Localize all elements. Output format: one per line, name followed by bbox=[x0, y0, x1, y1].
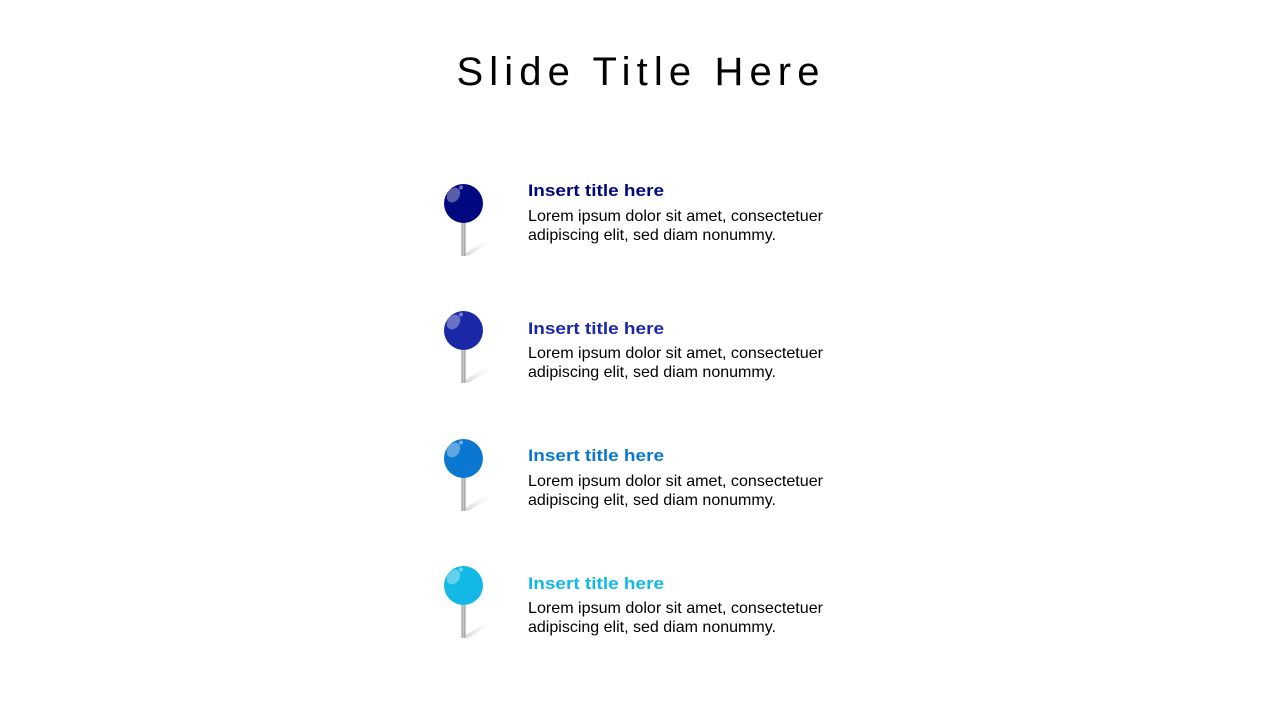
icon: pin 1 bbox=[444, 184, 490, 256]
text block 3: Lorem ipsum dolor sit amet, consectetuer bbox=[528, 473, 824, 490]
text block 1: Insert title here bbox=[528, 181, 664, 200]
text block 4: Insert title here bbox=[528, 574, 664, 593]
text block 1: Lorem ipsum dolor sit amet, consectetuer bbox=[528, 208, 824, 225]
text block 4: adipiscing elit, sed diam nonummy. bbox=[528, 619, 776, 636]
icon: pin 2 bbox=[444, 311, 490, 383]
text block 2: Lorem ipsum dolor sit amet, consectetuer bbox=[528, 345, 824, 362]
item 2 bbox=[444, 311, 824, 383]
text block 3 bbox=[528, 446, 824, 509]
item 3 bbox=[444, 439, 824, 511]
title: Slide Title Here bbox=[456, 50, 820, 94]
item 1 bbox=[444, 181, 824, 256]
text block 3: Insert title here bbox=[528, 446, 664, 465]
text block 2: adipiscing elit, sed diam nonummy. bbox=[528, 364, 776, 381]
text block 2: Insert title here bbox=[528, 319, 664, 338]
text block 3: adipiscing elit, sed diam nonummy. bbox=[528, 492, 776, 509]
text block 1: adipiscing elit, sed diam nonummy. bbox=[528, 227, 776, 244]
text block 2 bbox=[528, 319, 824, 381]
icon: pin 4 bbox=[444, 566, 490, 638]
text block 4: Lorem ipsum dolor sit amet, consectetuer bbox=[528, 600, 824, 617]
icon: pin 3 bbox=[444, 439, 490, 511]
text block 1 bbox=[528, 181, 824, 244]
item 4 bbox=[444, 566, 824, 638]
text block 4 bbox=[528, 574, 824, 636]
